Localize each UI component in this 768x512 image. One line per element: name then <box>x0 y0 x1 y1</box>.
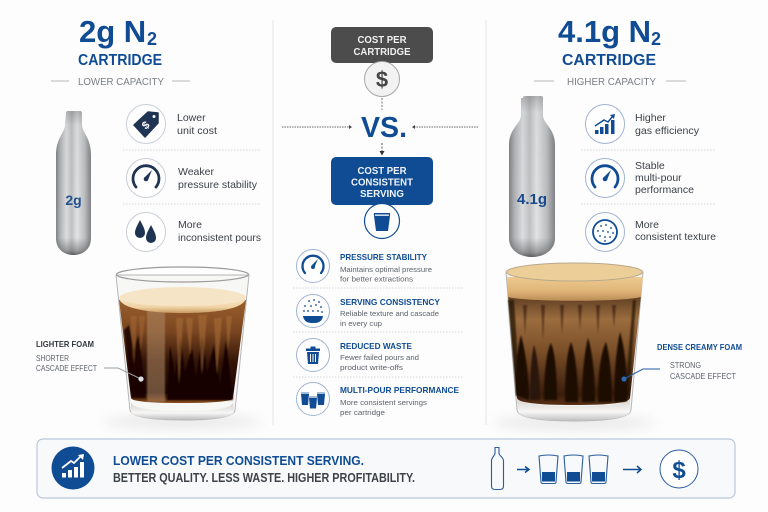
callout: lighter foam: SHORTER <box>36 353 69 363</box>
arrow: cups to dollar <box>623 466 641 473</box>
item: multi-pour performance: More consistent servings <box>340 398 427 407</box>
heading: 4.1g N2 cartridge: 2 <box>651 29 661 49</box>
item: serving consistency: SERVING CONSISTENCY <box>340 297 440 307</box>
feature: more inconsistent pours: More <box>178 219 202 231</box>
item: reduced waste: Fewer failed pours and <box>340 353 419 362</box>
heading: 4.1g N2 cartridge <box>558 14 661 69</box>
item: multi-pour performance: MULTI-POUR PERFORMANCE <box>340 385 459 395</box>
callout: lighter foam: LIGHTER FOAM <box>36 339 94 349</box>
feature: more consistent texture: More <box>635 219 659 231</box>
heading: VS.: VS. <box>361 112 407 144</box>
icon: dollar coin <box>364 62 400 96</box>
feature: weaker pressure stability <box>126 158 258 198</box>
arrow: bottle to cups <box>517 466 529 472</box>
text: banner message <box>113 453 415 485</box>
box: cost per consistent serving: SERVING <box>360 189 404 200</box>
panel: 4.1g cartridge <box>492 14 742 429</box>
item: pressure stability: for better extractions <box>340 274 413 284</box>
heading: 4.1g N2 cartridge: 4.1g N <box>558 14 651 49</box>
box: cost per cartridge: COST PER <box>358 35 407 46</box>
item: serving consistency <box>296 294 440 328</box>
callout: dense creamy foam: CASCADE EFFECT <box>670 371 736 381</box>
icon: growth chart <box>52 446 94 490</box>
feature: higher gas efficiency <box>586 104 700 144</box>
subheading: lower capacity <box>51 76 190 88</box>
item: pressure stability: Maintains optimal pressure <box>340 265 432 274</box>
feature: more inconsistent pours: inconsistent pours <box>178 232 261 244</box>
box: cost per consistent serving: COST PER <box>358 166 407 177</box>
item: pressure stability: PRESSURE STABILITY <box>340 252 427 262</box>
feature: stable multi-pour performance: multi-pour <box>635 172 682 184</box>
heading: 4.1g N2 cartridge: CARTRIDGE <box>562 52 656 69</box>
feature: weaker pressure stability: Weaker <box>178 166 214 178</box>
item: multi-pour performance <box>296 382 459 417</box>
feature: more consistent texture: consistent texture <box>635 231 716 243</box>
feature: higher gas efficiency: Higher <box>635 112 666 124</box>
heading: 2g N2 cartridge: CARTRIDGE <box>78 52 162 69</box>
icon: dollar circle: $ <box>672 457 686 484</box>
box: cost per consistent serving: CONSISTENT <box>351 178 413 188</box>
subheading: lower capacity: LOWER CAPACITY <box>78 76 164 88</box>
heading: 2g N2 cartridge <box>78 14 162 69</box>
panel: comparison <box>282 27 478 417</box>
callout: dense creamy foam <box>621 342 742 382</box>
icon: bottle outline <box>492 448 504 490</box>
feature: weaker pressure stability: pressure stability <box>178 179 258 191</box>
icon: 4.1g bottle: 4.1g <box>517 191 547 208</box>
feature: lower unit cost: unit cost <box>177 125 217 137</box>
item: reduced waste: REDUCED WASTE <box>340 341 412 351</box>
box: cost per cartridge <box>331 27 433 63</box>
item: serving consistency: Reliable texture and cascade <box>340 309 439 318</box>
illustration: glass with dense foam <box>492 263 656 429</box>
callout: dense creamy foam: DENSE CREAMY FOAM <box>657 342 742 352</box>
banner: conclusion <box>37 439 735 498</box>
arrow: dotted left <box>412 125 478 129</box>
item: multi-pour performance: per cartridge <box>340 408 385 417</box>
feature: lower unit cost: Lower <box>177 112 206 124</box>
feature: stable multi-pour performance: Stable <box>635 160 665 172</box>
box: cost per consistent serving <box>331 157 433 205</box>
box: cost per cartridge: CARTRIDGE <box>354 47 411 58</box>
arrow: dashed down <box>380 143 384 156</box>
icon: cup <box>364 204 400 238</box>
item: reduced waste <box>296 338 419 372</box>
panel: 2g cartridge <box>36 14 263 428</box>
icon: 2g bottle: 2g <box>65 192 82 208</box>
dividers <box>272 20 274 425</box>
icon: dollar circle <box>660 450 698 488</box>
item: reduced waste: product write-offs <box>340 363 403 372</box>
feature: lower unit cost: $ <box>140 119 152 132</box>
item: serving consistency: in every cup <box>340 319 382 328</box>
icon: dollar coin: $ <box>376 67 388 92</box>
subheading: higher capacity: HIGHER CAPACITY <box>567 76 656 88</box>
illustration: glass with lighter foam <box>103 267 263 428</box>
callout: dense creamy foam: STRONG <box>670 360 701 370</box>
icons: three cups <box>539 455 608 484</box>
feature: more consistent texture <box>586 212 716 252</box>
arrow: dotted right <box>282 125 352 129</box>
text: banner message: LOWER COST PER CONSISTENT SERVING. <box>113 453 364 468</box>
feature: stable multi-pour performance <box>586 158 694 198</box>
icon: 4.1g bottle <box>509 96 555 257</box>
feature: more inconsistent pours <box>126 212 261 252</box>
icon: 2g bottle <box>56 111 91 255</box>
heading: 2g N2 cartridge: 2g N <box>79 14 146 49</box>
feature: higher gas efficiency: gas efficiency <box>635 125 700 137</box>
callout: lighter foam: CASCADE EFFECT <box>36 363 97 373</box>
feature: lower unit cost <box>126 104 217 144</box>
text: banner message: BETTER QUALITY. LESS WASTE. HIGHER PROFITABILITY. <box>113 470 415 485</box>
heading: 2g N2 cartridge: 2 <box>147 29 157 49</box>
item: pressure stability <box>296 250 432 284</box>
callout: lighter foam <box>36 339 144 382</box>
feature: stable multi-pour performance: performance <box>635 184 694 196</box>
